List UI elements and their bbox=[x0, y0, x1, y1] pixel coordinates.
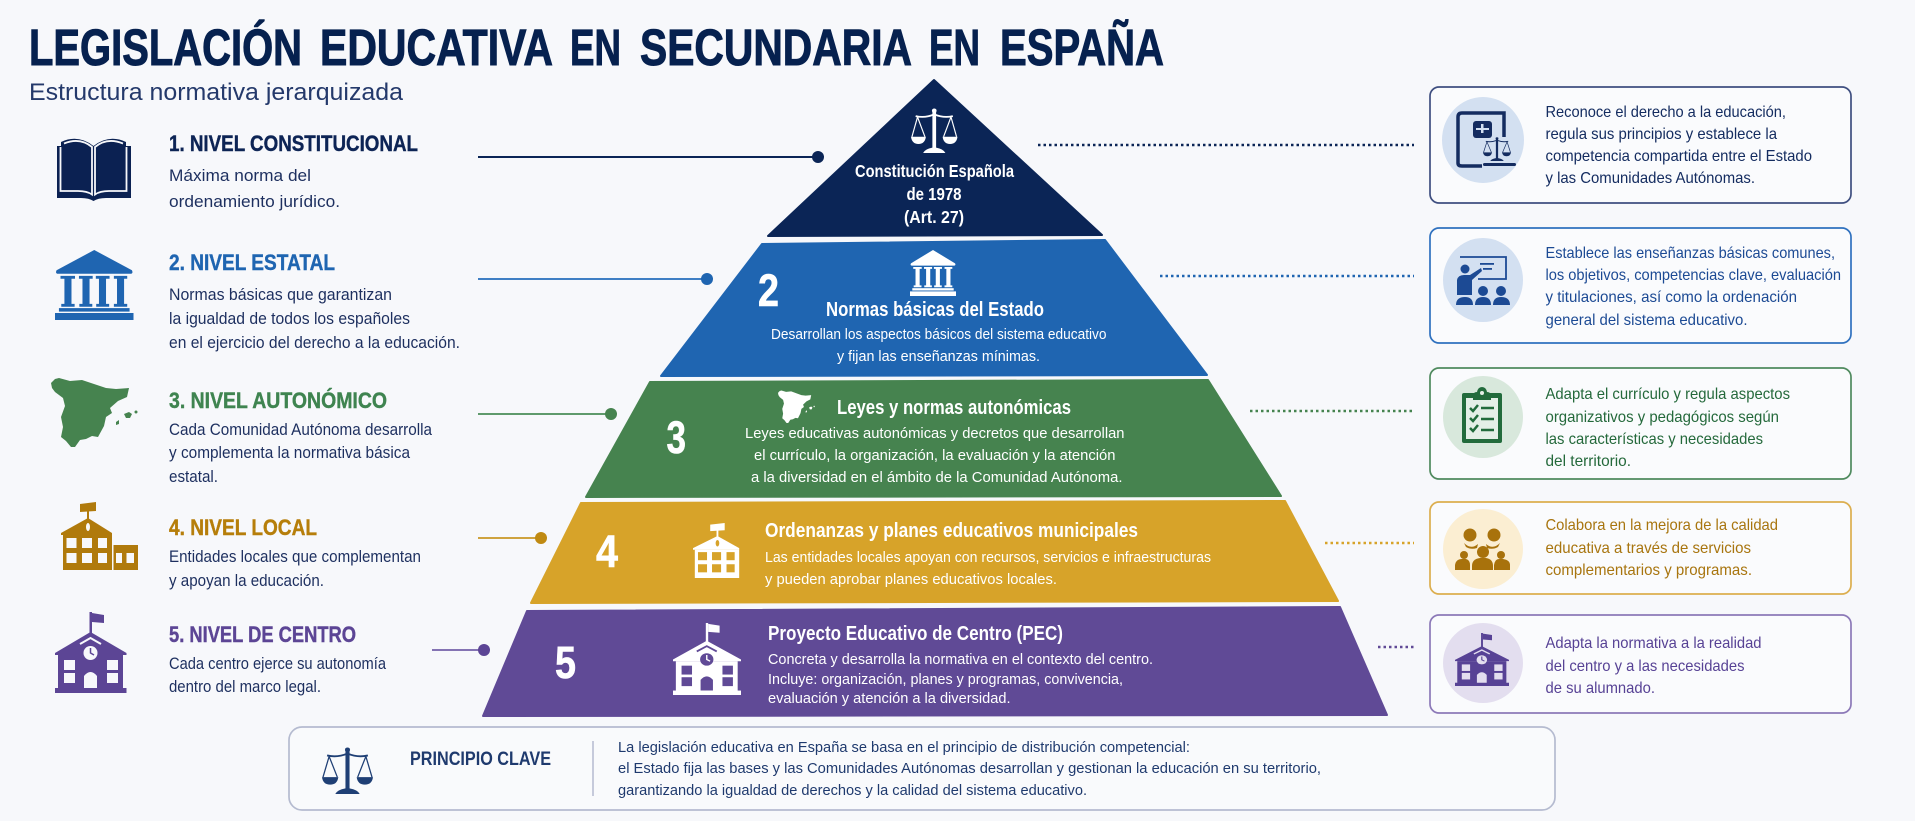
description: ordenamiento jurídico. bbox=[169, 193, 340, 211]
level 4: local bbox=[61, 502, 547, 590]
card frame bbox=[1430, 502, 1851, 594]
card text bbox=[1546, 386, 1790, 470]
tier text bbox=[768, 623, 1153, 707]
connector bbox=[432, 644, 490, 656]
tier text: Concreta y desarrolla la normativa en el contexto del centro. bbox=[768, 651, 1153, 668]
tier text: evaluación y atención a la diversidad. bbox=[768, 690, 1010, 707]
tier text: Constitución Española bbox=[855, 161, 1014, 181]
tier text: Normas básicas del Estado bbox=[826, 299, 1044, 321]
icon: temple bbox=[55, 250, 134, 320]
subtitle: Estructura normativa jerarquizada bbox=[29, 79, 404, 106]
card frame bbox=[1430, 87, 1851, 203]
card frame bbox=[1430, 615, 1851, 713]
icon: teacher with students bbox=[1443, 238, 1523, 322]
frame bbox=[289, 727, 1555, 810]
card 4 bbox=[1430, 502, 1851, 594]
title: EN bbox=[929, 19, 980, 76]
tier text: Leyes y normas autonómicas bbox=[837, 397, 1071, 419]
level 2: estatal bbox=[55, 250, 713, 352]
panel: left levels bbox=[51, 131, 824, 696]
dotted connectors bbox=[1038, 145, 1414, 647]
card text bbox=[1546, 635, 1762, 697]
description: Cada Comunidad Autónoma desarrolla bbox=[169, 421, 433, 439]
title: LEGISLACIÓN bbox=[29, 19, 302, 76]
description: y apoyan la educación. bbox=[169, 572, 324, 590]
heading: 5. NIVEL DE CENTRO bbox=[169, 622, 356, 647]
tier text: Leyes educativas autonómicas y decretos que desarrollan bbox=[745, 425, 1124, 442]
description: en el ejercicio del derecho a la educación. bbox=[169, 334, 460, 352]
number: 4 bbox=[596, 526, 618, 577]
card text: competencia compartida entre el Estado bbox=[1546, 148, 1812, 165]
tier text: Ordenanzas y planes educativos municipales bbox=[765, 520, 1138, 542]
tier text bbox=[855, 161, 1014, 227]
tier text: a la diversidad en el ámbito de la Comunidad Autónoma. bbox=[751, 469, 1122, 486]
tier 1: Constitución bbox=[768, 80, 1102, 236]
card text: las características y necesidades bbox=[1546, 431, 1763, 448]
text block: La legislación educativa en España se basa en el principio de distribución competencial: bbox=[618, 739, 1190, 756]
card text: general del sistema educativo. bbox=[1546, 312, 1748, 329]
card 3 bbox=[1430, 368, 1851, 479]
description: estatal. bbox=[169, 468, 218, 486]
tier text: y pueden aprobar planes educativos locales. bbox=[765, 571, 1057, 588]
heading: 4. NIVEL LOCAL bbox=[169, 515, 317, 540]
icon: clipboard checklist bbox=[1443, 376, 1523, 458]
tier shape bbox=[586, 380, 1281, 497]
card text: del centro y a las necesidades bbox=[1546, 658, 1744, 675]
connector bbox=[478, 532, 547, 544]
description bbox=[169, 548, 421, 590]
heading: 2. NIVEL ESTATAL bbox=[169, 250, 335, 275]
card text: Establece las enseñanzas básicas comunes, bbox=[1546, 245, 1835, 262]
title bbox=[29, 18, 1164, 76]
card frame bbox=[1430, 368, 1851, 479]
number: 2 bbox=[758, 265, 779, 316]
icon: map of Spain bbox=[51, 378, 138, 447]
title: EDUCATIVA bbox=[320, 19, 553, 76]
card text bbox=[1546, 245, 1841, 329]
description bbox=[169, 286, 460, 352]
text block: el Estado fija las bases y las Comunidades Autónomas desarrollan y gestionan la educación en su territorio, bbox=[618, 760, 1321, 777]
text block bbox=[618, 739, 1321, 799]
tier text bbox=[745, 397, 1124, 486]
text block: garantizando la igualdad de derechos y la calidad del sistema educativo. bbox=[618, 782, 1087, 799]
tier 5: PEC bbox=[483, 607, 1387, 716]
description: Máxima norma del bbox=[169, 167, 311, 185]
tier text bbox=[765, 520, 1211, 588]
card text bbox=[1546, 517, 1778, 579]
panel: right cards bbox=[1430, 87, 1851, 713]
tier text: Las entidades locales apoyan con recursos, servicios e infraestructuras bbox=[765, 549, 1211, 566]
description: la igualdad de todos los españoles bbox=[169, 310, 410, 328]
icon: town school bbox=[693, 523, 739, 578]
panel: principio clave bbox=[289, 727, 1555, 810]
tier text: Incluye: organización, planes y programas, convivencia, bbox=[768, 671, 1123, 688]
description bbox=[169, 421, 433, 486]
card 1 bbox=[1430, 87, 1851, 203]
icon: scales bbox=[322, 747, 373, 794]
tier text bbox=[771, 299, 1106, 365]
tier text: de 1978 bbox=[906, 184, 962, 204]
pyramid bbox=[483, 80, 1387, 716]
icon: community group bbox=[1443, 509, 1523, 589]
title: ESPAÑA bbox=[1000, 18, 1164, 76]
card text bbox=[1546, 104, 1812, 187]
card text: Adapta el currículo y regula aspectos bbox=[1546, 386, 1790, 403]
card text: educativa a través de servicios bbox=[1546, 540, 1751, 557]
heading: PRINCIPIO CLAVE bbox=[410, 749, 551, 770]
heading: 1. NIVEL CONSTITUCIONAL bbox=[169, 131, 418, 156]
connector bbox=[478, 408, 617, 420]
tier 3: Leyes autonómicas bbox=[586, 380, 1281, 497]
tier text: y fijan las enseñanzas mínimas. bbox=[837, 348, 1040, 365]
number: 3 bbox=[666, 412, 686, 463]
description: dentro del marco legal. bbox=[169, 678, 321, 696]
tier shape bbox=[531, 501, 1338, 603]
card text: organizativos y pedagógicos según bbox=[1546, 409, 1779, 426]
description: Entidades locales que complementan bbox=[169, 548, 421, 566]
card text: y titulaciones, así como la ordenación bbox=[1546, 289, 1797, 306]
title: SECUNDARIA bbox=[640, 19, 912, 76]
title: EN bbox=[570, 19, 621, 76]
heading: 3. NIVEL AUTONÓMICO bbox=[169, 388, 387, 413]
icon: open book bbox=[57, 139, 131, 201]
number: 5 bbox=[555, 637, 576, 688]
tier 4: Ordenanzas bbox=[531, 501, 1338, 603]
icon: school with clock bbox=[673, 623, 741, 695]
card text: del territorio. bbox=[1546, 453, 1631, 470]
card text: de su alumnado. bbox=[1546, 680, 1655, 697]
card text: regula sus principios y establece la bbox=[1546, 126, 1777, 143]
connector bbox=[478, 273, 713, 285]
card frame bbox=[1430, 228, 1851, 343]
tier 2: Normas básicas bbox=[661, 240, 1207, 376]
tier text: (Art. 27) bbox=[904, 207, 964, 227]
card text: los objetivos, competencias clave, evaluación bbox=[1546, 267, 1841, 284]
card 2 bbox=[1430, 228, 1851, 343]
level 5: centro bbox=[55, 612, 490, 696]
card text: Adapta la normativa a la realidad bbox=[1546, 635, 1762, 652]
tier shape bbox=[768, 80, 1102, 236]
icon: town school bbox=[61, 502, 138, 570]
description: Normas básicas que garantizan bbox=[169, 286, 392, 304]
description: Cada centro ejerce su autonomía bbox=[169, 655, 387, 673]
icon: temple bbox=[910, 250, 956, 296]
icon: scales bbox=[911, 108, 958, 153]
icon: school with clock bbox=[55, 612, 126, 693]
card 5 bbox=[1430, 615, 1851, 713]
icon: map of Spain bbox=[778, 390, 815, 423]
level 1: constitucional bbox=[57, 131, 824, 211]
tier text: el currículo, la organización, la evaluación y la atención bbox=[754, 447, 1116, 464]
level 3: autonomico bbox=[51, 378, 617, 486]
tier text: Desarrollan los aspectos básicos del sistema educativo bbox=[771, 326, 1106, 343]
card text: Reconoce el derecho a la educación, bbox=[1546, 104, 1786, 121]
description bbox=[169, 167, 340, 211]
description: y complementa la normativa básica bbox=[169, 444, 411, 462]
tier shape bbox=[661, 240, 1207, 376]
connector bbox=[478, 151, 824, 163]
card text: y las Comunidades Autónomas. bbox=[1546, 170, 1755, 187]
icon: book and scales bbox=[1442, 97, 1524, 183]
card text: complementarios y programas. bbox=[1546, 562, 1752, 579]
tier shape bbox=[483, 607, 1387, 716]
icon: school bbox=[1443, 623, 1523, 703]
description bbox=[169, 655, 387, 696]
card text: Colabora en la mejora de la calidad bbox=[1546, 517, 1778, 534]
tier text: Proyecto Educativo de Centro (PEC) bbox=[768, 623, 1063, 645]
